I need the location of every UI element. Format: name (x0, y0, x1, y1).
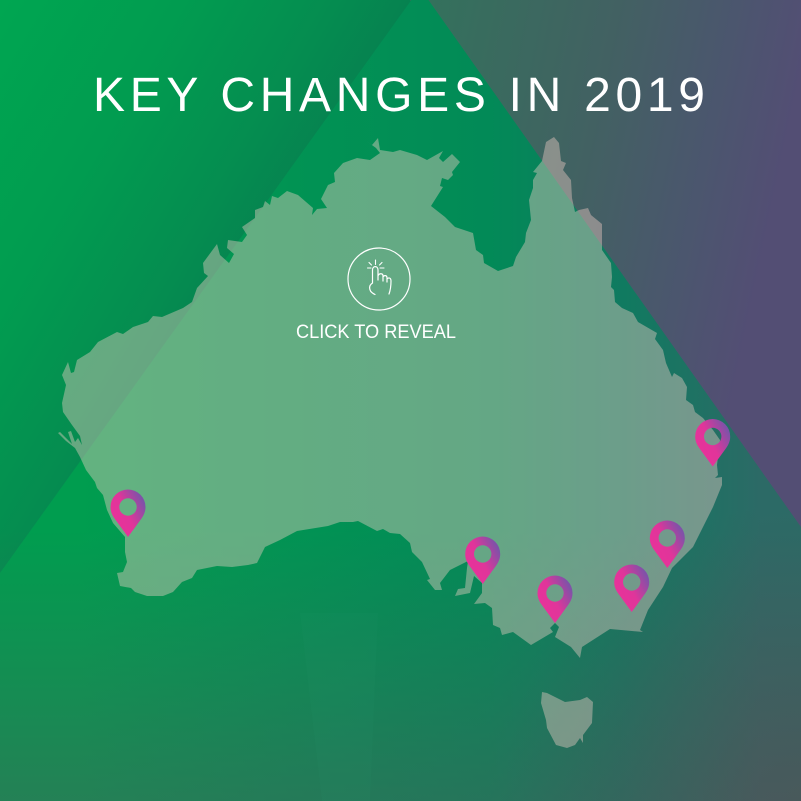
map pins (110, 419, 730, 623)
pin: South Australia (465, 536, 500, 584)
pin: Victoria (538, 576, 572, 623)
faint column reflection (300, 613, 378, 801)
icon: circle with pointing hand (348, 248, 410, 310)
mainland (58, 137, 722, 658)
pin: New South Wales (650, 520, 685, 568)
label: click to reveal: CLICK TO REVEAL (296, 321, 456, 343)
bottom shading (0, 530, 801, 801)
background left of triangle (0, 0, 425, 600)
pin: Canberra (614, 564, 649, 612)
bottom right shading (501, 501, 801, 801)
background right of triangle (410, 0, 801, 540)
title: KEY CHANGES IN 2019 (93, 69, 705, 122)
pin: Western Australia (110, 490, 146, 537)
click to reveal button (296, 248, 456, 343)
pin: Queensland (695, 419, 730, 466)
map of Australia (58, 137, 722, 748)
Tasmania (541, 692, 593, 748)
